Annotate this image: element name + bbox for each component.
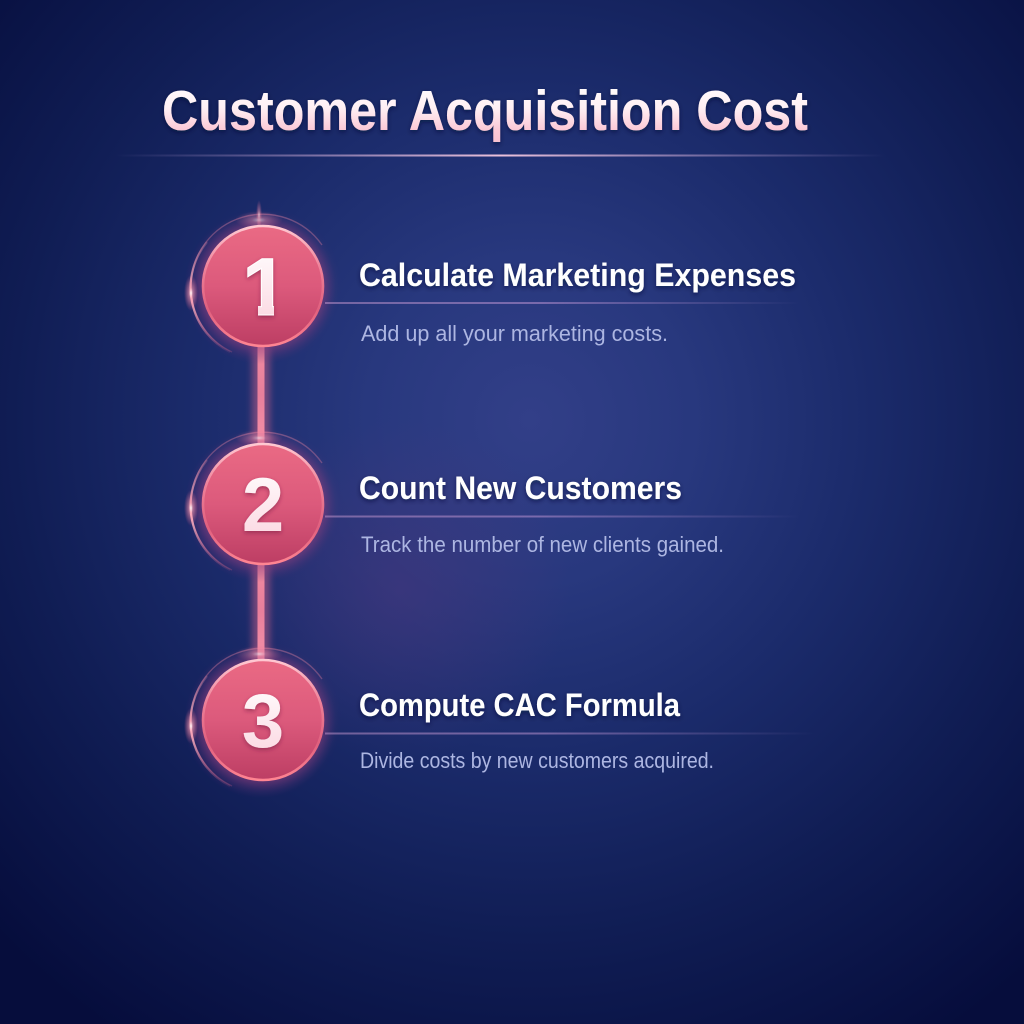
step 1 heading: Calculate Marketing Expenses xyxy=(359,257,796,293)
step 2 xyxy=(184,430,800,582)
step 2 badge xyxy=(184,430,336,582)
step 3 heading: Compute CAC Formula xyxy=(359,687,680,723)
step 2 divider xyxy=(325,516,800,518)
step 3 divider xyxy=(325,732,815,734)
step 1 divider xyxy=(325,302,800,304)
title divider xyxy=(115,154,885,156)
step 1 number: 1 xyxy=(242,242,288,333)
step 2 description: Track the number of new clients gained. xyxy=(361,532,724,557)
connector: step 2 to step 3 xyxy=(252,564,270,660)
step 3 badge xyxy=(184,646,336,798)
step 2 number: 2 xyxy=(242,463,284,548)
step 1 badge xyxy=(184,200,336,364)
step 1 xyxy=(184,200,800,364)
step 2 heading: Count New Customers xyxy=(359,470,682,506)
step 3 xyxy=(184,646,815,798)
connector: step 1 to step 2 xyxy=(252,346,270,444)
step 3 description: Divide costs by new customers acquired. xyxy=(360,748,714,773)
step 3 number: 3 xyxy=(242,679,284,764)
title: Customer Acquisition Cost xyxy=(162,79,808,143)
step 1 description: Add up all your marketing costs. xyxy=(361,321,668,346)
